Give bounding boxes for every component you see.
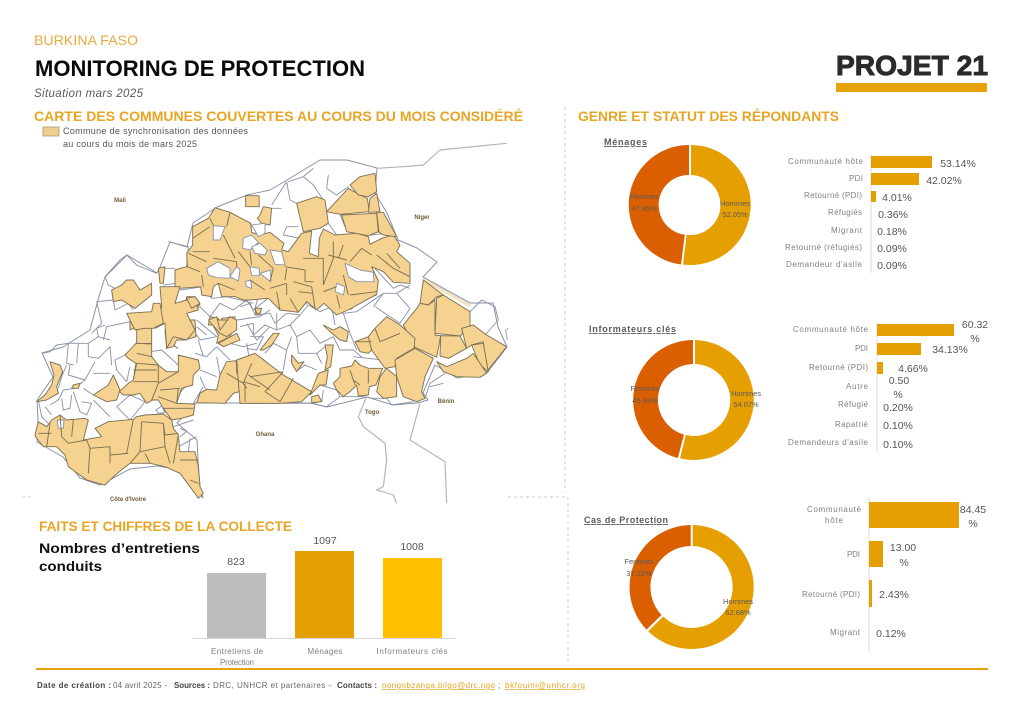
footer text: ; [498,681,500,690]
bar chart: households by status: PDI [849,174,863,183]
footer text: Contacts : [337,681,377,690]
bar chart: key informants by status: 4.66% [898,363,928,375]
covered communes: west and south-west [35,320,260,498]
bar chart: households by status: 0.09% [877,243,907,255]
bar chart: protection cases by status: 13.00 [890,542,916,554]
donut: key informants by gender: 45.93% [632,396,658,405]
donut: key informants by gender: Femmes [630,384,660,393]
bar chart: protection cases by status: 84.45 [960,504,986,516]
subheading: key informants: Informateurs clés [589,324,676,334]
bar chart: households by status: 42.02% [926,175,962,187]
bar chart: households by status: 4.01% [882,192,912,204]
bar chart: protection cases by status: Migrant [830,628,861,637]
donut: households by gender [629,145,751,265]
bar chart: protection cases by status: 2.43% [879,589,909,601]
bar chart: households by status: Réfugiés [828,208,862,217]
footer text: Sources : [174,681,210,690]
inner commune boundaries [38,212,410,483]
bar chart: key informants by status: Retourné (PDI) [809,363,868,372]
map legend: Commune de synchronisation des données [63,126,248,136]
covered communes: north and centre [175,173,410,325]
bar chart: key informants by status: PDI [855,344,868,353]
bar chart: key informants by status: % [893,389,903,401]
bar chart: key informants by status: % [970,333,980,345]
logo: Projet 21: PROJET 21 [836,50,988,81]
bar chart: key informants by status: 0.10% [883,439,913,451]
bar chart: interviews: 1097 [313,535,337,547]
footer text: Date de création : [37,681,111,690]
donut: key informants by gender [630,340,761,460]
subheading: protection cases: Cas de Protection [584,515,668,525]
title: MONITORING DE PROTECTION [35,56,365,81]
footer text: bkfouini@unhcr.org [505,681,585,690]
bar chart: protection cases by status: Retourné (PDI) [802,590,860,599]
bar chart: protection cases by status: Communauté [807,505,862,514]
bar chart: key informants by status: Autre [846,382,869,391]
donut: households by gender: Femmes [629,192,659,201]
bar chart: households by status: Migrant [831,226,863,235]
bar chart: interviews [192,535,456,667]
footer text: nongobzanga.bilgo@drc.ngo [382,681,496,690]
bar chart: key informants by status: Réfugié [838,400,869,409]
bar chart: protection cases by status: 0.12% [876,628,906,640]
covered communes: east and south [237,280,507,403]
donut: households by gender: 52.05% [722,210,748,219]
country labels: Bénin [438,399,455,405]
footer text: DRC, UNHCR et partenaires - [213,681,331,690]
bar chart: households by status: 0.09% [877,260,907,272]
map legend: au cours du mois de mars 2025 [63,139,197,149]
donut: protection cases by gender [624,525,754,649]
interview count title: conduits [39,558,102,574]
donut: households by gender: 47.95% [631,204,657,213]
bar chart: households by status: Retourné (PDI) [804,191,862,200]
country labels: Togo [365,410,379,416]
country labels [110,198,455,503]
bar chart: households by status: Retourné (réfugiés) [785,243,862,252]
uncovered communes inside covered areas [207,223,374,295]
bar chart: key informants by status [788,319,988,452]
subtitle: Situation mars 2025 [34,88,144,100]
bar chart: protection cases by status: PDI [847,550,860,559]
header: country: BURKINA FASO [34,32,138,48]
covered communes: central band [112,267,240,348]
bar chart: interviews: 823 [227,556,245,568]
country labels: Ghana [256,432,275,438]
heading: respondents section: GENRE ET STATUT DES RÉPONDANTS [578,108,839,124]
donut: protection cases by gender: Hommes [723,597,753,606]
country labels: Niger [414,215,430,221]
donut: households by gender: Hommes [720,199,750,208]
bar chart: key informants by status: 0.50 [889,375,909,387]
bar chart: protection cases by status: hôte [825,516,844,525]
bar chart: key informants by status: 34.13% [932,344,968,356]
bar chart: key informants by status: Demandeurs d'asile [788,438,869,447]
interview count title: Nombres d’entretiens [39,540,200,556]
country labels: Mali [114,198,126,204]
footer rule [36,668,988,670]
bar chart: protection cases by status [802,497,986,652]
bar chart: interviews: 1008 [400,541,424,553]
bar chart: key informants by status: Communauté hôte [793,325,869,334]
heading: facts and figures: FAITS ET CHIFFRES DE LA COLLECTE [39,518,292,534]
neighbouring country borders [358,143,508,503]
country labels: Côte d'Ivoire [110,497,147,503]
bar chart: interviews: Informateurs clés [376,647,448,656]
bar chart: key informants by status: 0.10% [883,420,913,432]
subheading: households: Ménages [604,137,647,147]
bar chart: key informants by status: 60.32 [962,319,988,331]
bar chart: interviews: Protection [220,658,254,667]
map legend [43,126,248,149]
heading: map section: CARTE DES COMMUNES COUVERTES AU COURS DU MOIS CONSIDÉRÉ [34,108,523,124]
donut: key informants by gender: Hommes [731,389,761,398]
donut: protection cases by gender: 62.68% [725,608,751,617]
bar chart: protection cases by status: % [899,557,909,569]
donut: key informants by gender: 54.07% [733,400,759,409]
bar chart: interviews: Entretiens de [211,647,264,656]
bar chart: households by status: Communauté hôte [788,157,864,166]
footer text [37,681,585,690]
footer text: 04 avril 2025 - [113,681,167,690]
donut: protection cases by gender: Femmes [624,557,654,566]
bar chart: households by status: 53.14% [940,158,976,170]
interview count title [39,540,200,574]
bar chart: households by status: Demandeur d'asile [786,260,863,269]
bar chart: households by status: 0.18% [877,226,907,238]
bar chart: interviews: Ménages [308,647,342,656]
donut: protection cases by gender: 37.32% [626,569,652,578]
bar chart: key informants by status: 0.20% [883,402,913,414]
bar chart: households by status: 0.36% [878,209,908,221]
map of Burkina Faso communes [35,160,507,498]
bar chart: key informants by status: Rapatrié [835,420,869,429]
bar chart: protection cases by status: % [968,518,978,530]
bar chart: households by status [785,154,976,273]
